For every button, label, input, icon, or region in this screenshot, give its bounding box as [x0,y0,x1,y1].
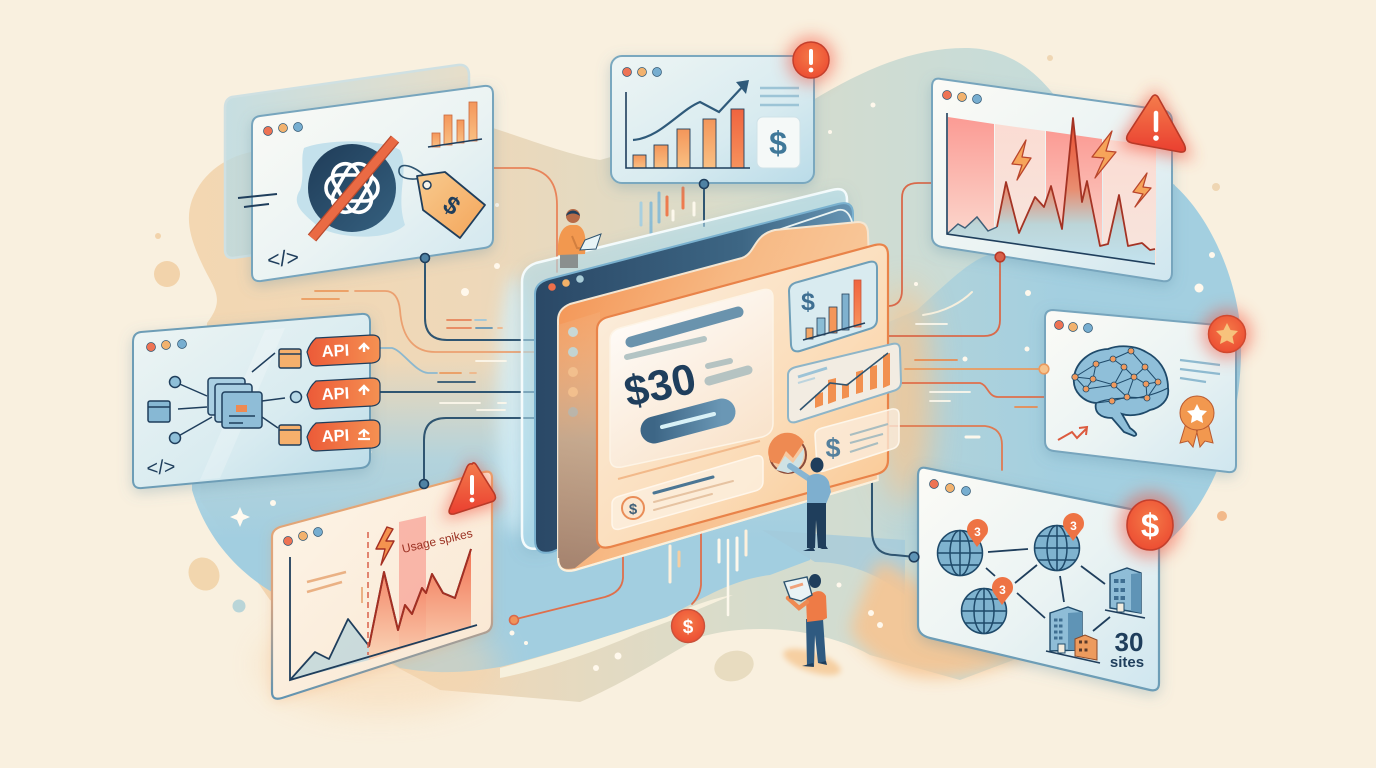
network links [986,549,1110,631]
AI logo disc [308,144,396,232]
connector: spike dot to centre [888,257,1000,336]
lightning bolt [376,527,394,565]
dashed marker [367,532,369,655]
tag: API two [307,378,380,409]
panel: API calls [133,314,380,488]
site count: 30 [1115,627,1143,657]
small bar chart [428,102,482,147]
person: top with laptop [558,209,601,268]
chart area [290,619,369,680]
trend arrow [633,84,745,140]
pin two: 3 [1070,519,1077,533]
coin on connector [672,610,704,642]
sparkle [230,507,250,527]
globe two [1034,526,1080,570]
node: usage panel [420,480,428,488]
strike-through bar [312,139,395,238]
window dots [548,275,584,291]
node: brain panel [1039,364,1049,374]
central dashboard stack [522,189,901,571]
glow: orange right of centre [879,285,931,505]
layer: outer glass [522,189,847,549]
alert: usage panel [442,458,502,520]
alert bands [948,117,1156,264]
call to action button [654,412,722,430]
connector: top-left panel to person [493,168,557,272]
building large [1050,607,1082,653]
window dots [146,340,186,352]
window dots [930,480,970,496]
small dash traces [302,291,1037,437]
connector: sites panel orange [890,426,1002,470]
left column [558,312,600,569]
tag: API two: API [321,385,350,404]
connector: spike panel to centre upper [888,183,932,306]
tag: API three [307,420,380,451]
panel: volatility chart [932,79,1172,281]
connector: sites panel dark [872,477,915,557]
panel: model price tag [238,86,493,281]
ticks below centre [670,531,746,615]
spike line [997,118,1155,250]
dollar tile: $ [769,125,787,161]
text lines [760,88,799,105]
building right [1110,568,1141,613]
mini trend arrow [1058,427,1087,440]
pin three [992,577,1013,605]
pie chart circle [768,433,806,473]
tag: API three: API [321,427,350,446]
dollar tile [757,117,800,168]
panel: best model [1045,310,1236,472]
connector: usage panel to centre [424,418,535,484]
connector lines [302,168,1045,619]
mini cost card: $ [825,433,841,463]
glow: pale blue left of centre [497,275,533,535]
pin one [967,519,988,547]
white sparkle dots [270,102,1215,671]
badge: star [1202,309,1252,359]
note lines [307,572,346,592]
axes [947,113,1155,264]
node: sites panel [909,552,919,562]
axes [290,557,477,680]
front glass outline [558,480,878,571]
pin three: 3 [999,583,1006,597]
equaliser ticks above centre [641,188,694,233]
text lines [1180,360,1220,382]
node: volatility panel [995,252,1005,262]
node: top-left panel [420,254,430,262]
connector: API to centre [378,391,535,393]
connector: down to coin [692,530,701,604]
panel: cost trend [611,56,814,183]
coin on connector: $ [683,617,694,638]
person: holding tablet [784,574,827,667]
badge: dollar: $ [1141,507,1159,544]
panel: usage spikes [272,472,492,699]
glass highlight [200,328,285,480]
chart label: Usage spikes [401,526,474,556]
panel: thirty sites [918,468,1159,690]
code glyph: </> [266,244,300,273]
alert: volatility panel [1118,88,1194,160]
person: pointing at chart [768,433,831,551]
connector: orange dashed trace [355,291,535,352]
connector: brain dot [905,368,1043,370]
background blob: orange under sites panel [850,560,1040,677]
background blob: blue right [870,183,1241,560]
cream stripe on lower wave [500,595,733,678]
brain icon [1072,346,1168,436]
connector: top centre panel to core [703,183,705,226]
window dots [942,90,982,104]
price: $30 [620,355,700,417]
billing row: $ [629,501,638,518]
lightning bolts [1012,131,1151,207]
globe one [938,530,982,576]
billing row [612,456,763,529]
window dots [622,68,662,76]
site count [1110,627,1144,671]
background blob: main peach to sage [189,48,1175,702]
price tag [399,166,485,238]
layer: front pricing card [597,244,888,548]
mini bar chart card: $ [801,288,815,316]
pale blob behind logo [297,141,405,237]
code glyph: </> [146,456,176,480]
highlighted band [399,516,426,647]
window dots [1054,320,1092,332]
tag: API one [307,335,380,366]
window dots [284,528,322,546]
mini trend card [788,344,901,422]
connector: lower left orange trace [516,548,623,619]
background dots [154,55,1227,686]
layer: dark window [535,203,853,553]
pin two [1063,513,1084,541]
badge: dollar [1119,492,1181,558]
ground shadow streak under person [762,530,905,595]
axes [626,92,750,168]
node: top centre [700,180,708,188]
sidebar dots [568,327,578,417]
connector: top-left panel to centre [425,258,535,340]
mini bar chart card [789,262,877,351]
connector: pale blue trace [380,348,437,373]
node: lower left [510,616,518,624]
building small orange [1075,635,1097,660]
award medal [1180,396,1214,447]
dash lines [238,194,277,207]
panel: back glass of no-subscription panel [225,65,469,258]
badge: top centre alert [787,36,835,84]
window dots [264,122,302,136]
site count: sites [1110,654,1144,671]
connector: brain panel lower [895,383,1045,397]
price tag: $ [438,190,465,221]
layer: tab glass [562,210,852,312]
tag: API one: API [321,342,350,361]
bars [633,109,744,168]
background blob: blue lower-left [192,340,810,672]
spike area [947,118,1155,264]
mini cost card [815,409,899,471]
layer: orange folder [558,222,878,571]
background blob: peach under usage panel [260,617,500,713]
globe three [962,588,1006,634]
spike line [290,549,471,680]
price card [610,289,773,467]
pin one: 3 [974,525,981,539]
network diagram [148,349,302,445]
